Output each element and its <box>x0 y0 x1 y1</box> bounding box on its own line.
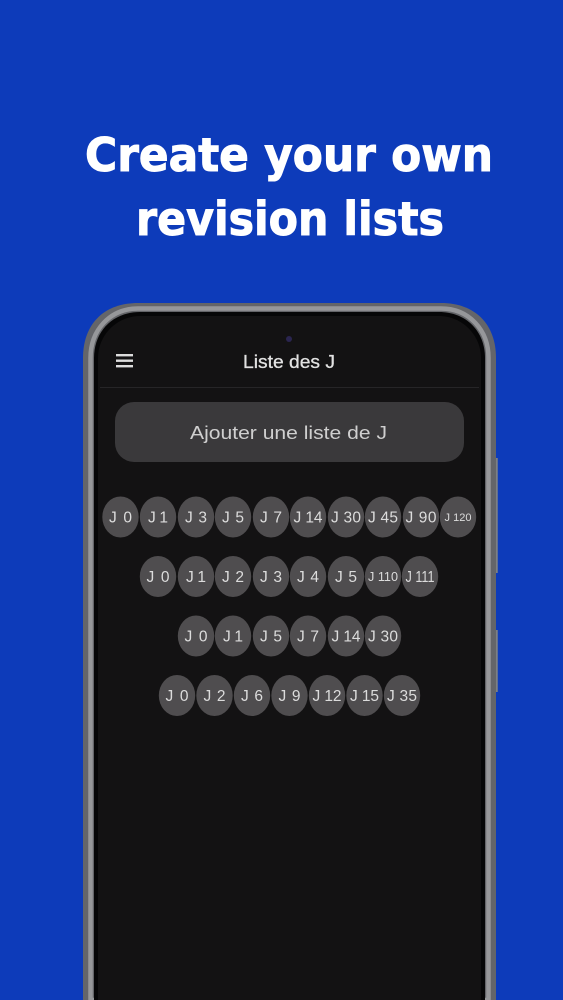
revision list row 1: J 1 <box>148 510 168 526</box>
revision list row 4: J 15 <box>350 688 379 705</box>
phone mockup <box>83 303 496 1000</box>
revision list row 2: J 110 <box>368 569 398 584</box>
revision list row 4: J 12 <box>312 688 342 705</box>
revision list row 3: J 7 <box>297 628 319 646</box>
revision list row 1: J 7 <box>260 510 282 526</box>
revision list row 1: J 90 <box>406 510 437 526</box>
revision list row 4: J 2 <box>204 688 226 705</box>
revision list row 1 <box>102 496 476 538</box>
revision list row 3: J 5 <box>260 628 282 646</box>
revision list row 1: J 45 <box>368 510 398 526</box>
add list button: Ajouter une liste de J <box>190 422 387 443</box>
title: Create your own <box>85 128 493 182</box>
revision list row 2 <box>140 556 438 597</box>
side buttons <box>495 458 498 692</box>
phone screen <box>94 312 485 1000</box>
phone frame <box>83 303 496 1000</box>
revision list row 4: J 9 <box>278 688 300 705</box>
revision list row 1: J 14 <box>294 510 323 526</box>
revision list row 4 <box>159 675 420 716</box>
revision list row 2: J 0 <box>146 569 170 586</box>
header divider <box>100 387 479 388</box>
revision list row 3 <box>178 616 401 656</box>
revision list row 4: J 0 <box>166 688 189 705</box>
revision list row 2: J 111 <box>406 569 434 586</box>
revision list row 2: J 1 <box>186 569 206 586</box>
revision list row 1: J 120 <box>444 512 472 524</box>
title: revision lists <box>136 192 444 246</box>
revision list row 3: J 14 <box>332 628 361 646</box>
revision list row 3: J 1 <box>223 628 243 646</box>
title <box>85 128 493 246</box>
revision list row 4: J 35 <box>387 688 417 705</box>
revision list row 1: J 0 <box>109 510 132 526</box>
camera <box>286 336 292 342</box>
revision list row 2: J 5 <box>335 569 357 586</box>
revision list row 1: J 3 <box>185 510 207 526</box>
screen heading: Liste des J <box>243 351 335 372</box>
revision list row 2: J 4 <box>297 569 319 586</box>
revision list row 1: J 30 <box>331 510 361 526</box>
revision list row 3: J 0 <box>184 628 208 646</box>
revision list row 1: J 5 <box>222 510 244 526</box>
revision list row 2: J 2 <box>222 569 244 586</box>
add list button <box>115 402 464 462</box>
revision list row 4: J 6 <box>241 688 263 705</box>
revision list row 2: J 3 <box>260 569 282 586</box>
menu icon <box>116 354 133 367</box>
revision list row 3: J 30 <box>368 628 398 646</box>
